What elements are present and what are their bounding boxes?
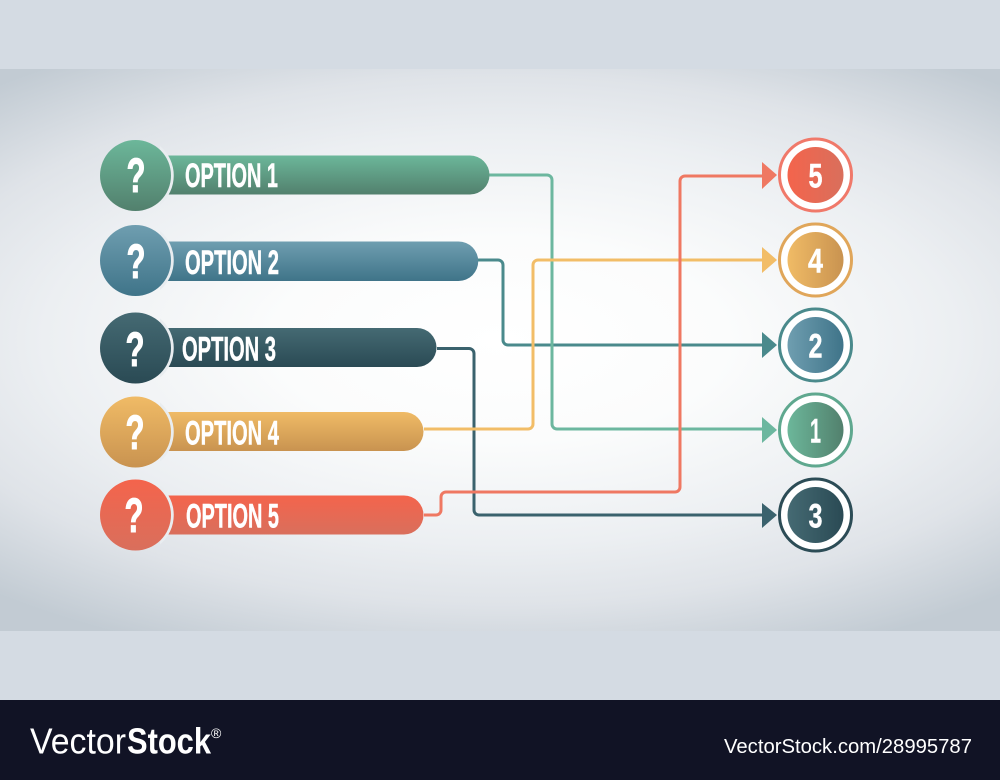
- option 1 row: [100, 140, 490, 211]
- connector: option 3 to circle 3: [437, 348, 777, 528]
- background panel: [0, 69, 1000, 631]
- result circle 5: 5: [808, 158, 822, 196]
- option 3 badge: [100, 312, 171, 384]
- option 4 question mark: ?: [126, 407, 144, 460]
- option 4 badge crescent: [160, 402, 174, 462]
- connector: option 2 to circle 2: [478, 260, 777, 358]
- result circle 1: [780, 394, 852, 466]
- option 5 row: [100, 480, 424, 550]
- option 5 label: OPTION 5: [186, 498, 279, 536]
- option 4 row: [100, 396, 424, 468]
- option 2 badge: [100, 225, 171, 296]
- option 3 bar: [160, 328, 436, 367]
- option 3 label: OPTION 3: [182, 330, 276, 368]
- option 5 badge crescent: [160, 486, 174, 544]
- result circle 2: [780, 309, 852, 381]
- option 4 label: OPTION 4: [185, 414, 279, 452]
- option 5 bar: [160, 496, 424, 534]
- option 2 bar: [160, 242, 478, 281]
- option 2 row: [100, 225, 478, 296]
- option 3 badge crescent: [160, 318, 174, 378]
- result circle 3: 3: [808, 498, 822, 536]
- logo word: Stock: Stock: [127, 720, 212, 762]
- option 1 badge: [100, 140, 171, 211]
- option 1 label: OPTION 1: [185, 157, 278, 195]
- result circle 1: 1: [810, 412, 821, 450]
- option 2 badge crescent: [160, 231, 174, 290]
- result circle 4: 4: [808, 242, 823, 280]
- option 5 question mark: ?: [124, 490, 144, 543]
- option 4 badge: [100, 396, 171, 468]
- footer bar: [0, 700, 1000, 780]
- option 2 label: OPTION 2: [185, 244, 279, 282]
- registered mark: ®: [211, 725, 222, 741]
- option 1 bar: [160, 156, 490, 194]
- connector: option 1 to circle 1: [489, 175, 777, 443]
- option 4 bar: [160, 412, 424, 451]
- option 5 badge: [100, 480, 171, 550]
- image id: VectorStock.com/28995787: [724, 736, 972, 758]
- option 3 row: [100, 312, 436, 384]
- result circle 4: [780, 224, 852, 296]
- option 1 badge crescent: [160, 146, 174, 205]
- logo word: Vector: Vector: [30, 720, 126, 762]
- result circle 5: [780, 139, 852, 211]
- connector: option 5 to circle 5: [424, 162, 777, 515]
- option 1 question mark: ?: [126, 150, 146, 203]
- connector: option 4 to circle 4: [424, 247, 777, 429]
- result circle 3: [780, 479, 852, 551]
- option 2 question mark: ?: [126, 236, 146, 289]
- option 3 question mark: ?: [126, 324, 144, 377]
- result circle 2: 2: [808, 328, 822, 366]
